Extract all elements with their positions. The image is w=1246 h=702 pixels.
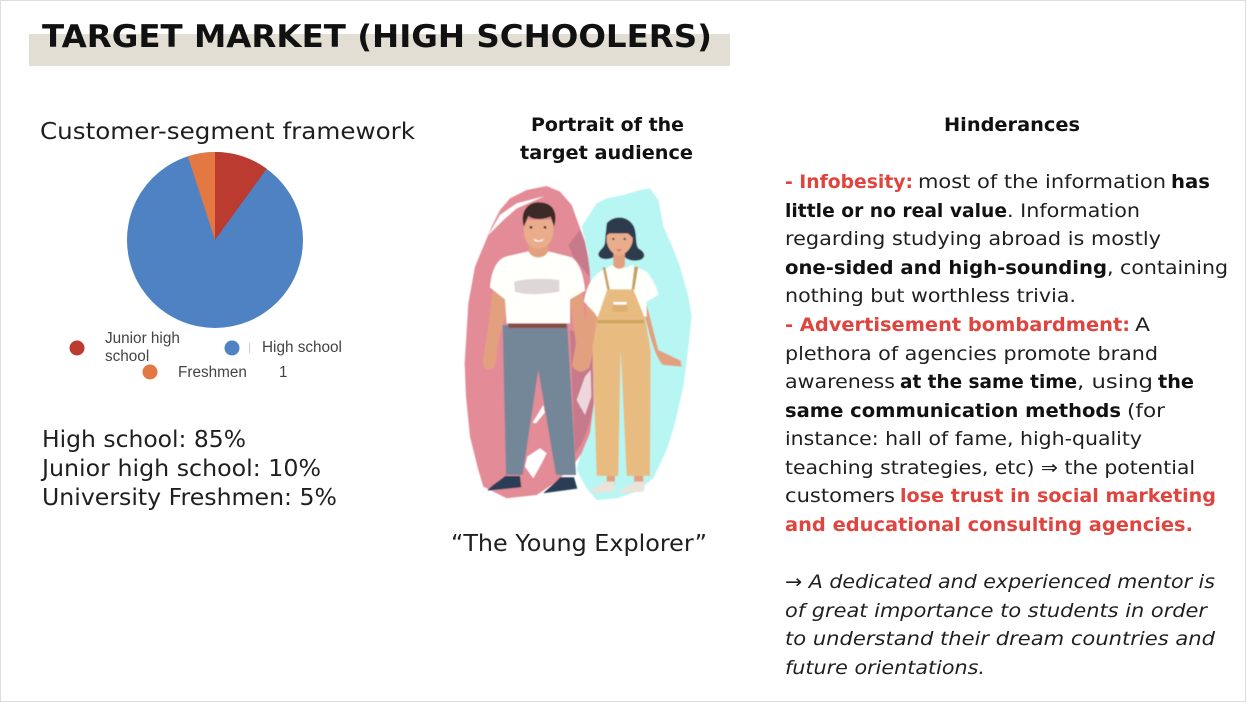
text block: advertisement bombardment: lose trust in social marketing (900, 485, 1216, 507)
pie chart (127, 152, 303, 328)
segment percentages (40, 427, 337, 511)
text block: advertisement bombardment: customers (785, 485, 895, 507)
heading: portrait: target audience (520, 142, 693, 164)
pie legend: Freshmen (178, 364, 247, 381)
heading: portrait: Portrait of the (531, 114, 684, 136)
text block: mentor conclusion: future orientations. (785, 657, 985, 679)
woman (578, 217, 682, 493)
text block: advertisement bombardment: , using (1077, 371, 1153, 393)
heading: portrait (520, 114, 693, 164)
pie legend: 1 (279, 364, 288, 381)
pie legend: school (105, 348, 149, 365)
segment percentages: University Freshmen: 5% (42, 485, 337, 511)
text block: infobesity (785, 171, 1228, 307)
pie legend (70, 330, 342, 381)
text block: infobesity: one-sided and high-sounding (785, 257, 1107, 279)
text block: advertisement bombardment: (for (1127, 400, 1165, 422)
segment percentages: Junior high school: 10% (40, 456, 321, 482)
panel: hinderances (785, 114, 1228, 679)
text block: advertisement bombardment: at the same time (900, 371, 1077, 393)
text block: mentor conclusion: to understand their dream countries and (785, 628, 1216, 650)
text block: infobesity: regarding studying abroad is mostly (785, 228, 1161, 250)
text block: mentor conclusion: of great importance to students in order (785, 600, 1208, 622)
text block: advertisement bombardment: A (1135, 314, 1150, 336)
panel: portrait of the target audience (451, 114, 707, 557)
man (483, 202, 589, 493)
heading: customer-segment framework: Customer-segment framework (40, 119, 416, 145)
text block: infobesity: little or no real value (785, 200, 1007, 222)
panel: customer segments (40, 119, 416, 511)
text block: advertisement bombardment: - Advertisement bombardment: (785, 314, 1130, 336)
text block: infobesity: has (1171, 171, 1210, 193)
text block: infobesity: nothing but worthless trivia. (785, 285, 1076, 307)
text block: advertisement bombardment: instance: hall of fame, high-quality (785, 428, 1142, 450)
pie legend: Junior high (105, 330, 180, 347)
text block: advertisement bombardment: the (1158, 371, 1194, 393)
title: TARGET MARKET (HIGH SCHOOLERS) (42, 19, 712, 55)
text block: infobesity: most of the information (918, 171, 1166, 193)
illustration: young couple on paint strokes (465, 186, 692, 500)
text block: mentor conclusion: → A dedicated and experienced mentor is (785, 571, 1215, 593)
heading: hinderances: Hinderances (944, 114, 1080, 136)
text block: advertisement bombardment: awareness (785, 371, 895, 393)
segment percentages: High school: 85% (42, 427, 246, 453)
text block: advertisement bombardment: teaching strategies, etc) ⇒ the potential (785, 457, 1195, 479)
caption: the young explorer: “The Young Explorer” (451, 531, 707, 557)
text block: mentor conclusion (785, 571, 1216, 679)
text block: infobesity: . Information (1007, 200, 1140, 222)
title (29, 19, 730, 66)
text block: infobesity: - Infobesity: (785, 171, 913, 193)
text block: advertisement bombardment: same communication methods (785, 400, 1121, 422)
text block: advertisement bombardment: plethora of agencies promote brand (785, 343, 1158, 365)
text block: infobesity: , containing (1107, 257, 1228, 279)
pie legend: High school (262, 339, 342, 356)
text block: advertisement bombardment: and educational consulting agencies. (785, 514, 1193, 536)
text block: advertisement bombardment (785, 314, 1216, 536)
